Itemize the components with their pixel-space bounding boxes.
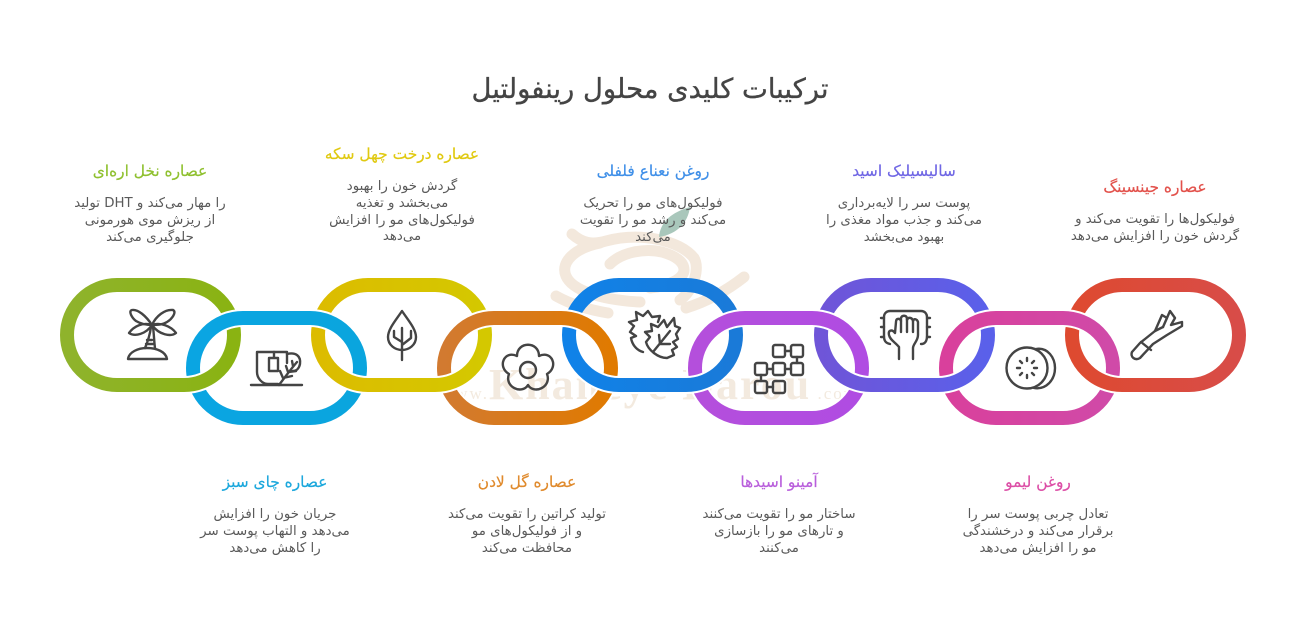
- text block: date palm: از ریزش موی هورمونی: [85, 213, 215, 228]
- text block: peppermint oil: می‌کند: [635, 230, 671, 245]
- link: even links over: [193, 318, 1113, 418]
- title: ترکیبات کلیدی محلول رینفولتیل: [472, 74, 828, 105]
- text block: salicylic acid: می‌کند و جذب مواد مغذی را: [826, 213, 982, 228]
- icon: tea cup with herb: [251, 352, 302, 385]
- text block: green tea: عصاره چای سبز: [223, 473, 327, 491]
- text block: amino acids: می‌کنند: [759, 541, 799, 556]
- text block: ginkgo: می‌دهد: [383, 229, 421, 244]
- text block: marigold: عصاره گل لادن: [478, 473, 576, 491]
- text block: amino acids: آمینو اسیدها: [740, 473, 818, 491]
- text block: ginseng: عصاره جینسینگ: [1103, 178, 1207, 196]
- icon: amino acid grid: [755, 345, 803, 393]
- icon: tree leaf: [388, 311, 416, 360]
- text block: lemon oil: مو را افزایش می‌دهد: [979, 541, 1097, 556]
- icon: palm tree: [128, 310, 176, 359]
- text block: green tea: جریان خون را افزایش: [214, 507, 336, 522]
- text block: date palm: عصاره نخل اره‌ای: [93, 162, 207, 180]
- text block: ginkgo: گردش خون را بهبود: [347, 179, 457, 194]
- text block: peppermint oil: روغن نعناع فلفلی: [597, 162, 709, 180]
- text block: date palm: [74, 162, 226, 245]
- text block: marigold: محافظت می‌کند: [482, 541, 572, 556]
- text block: amino acids: ساختار مو را تقویت می‌کنند: [702, 507, 856, 522]
- text block: ginkgo: می‌بخشد و تغذیه: [356, 196, 448, 211]
- text block: ginkgo: فولیکول‌های مو را افزایش: [329, 213, 475, 228]
- text block: ginseng: گردش خون را افزایش می‌دهد: [1071, 229, 1239, 244]
- link: odd links lower interlock: [62, 345, 1244, 394]
- text block: marigold: تولید کراتین را تقویت می‌کند: [448, 507, 606, 522]
- text block: lemon oil: تعادل چربی پوست سر را: [968, 507, 1108, 522]
- text block: peppermint oil: فولیکول‌های مو را تحریک: [583, 196, 723, 211]
- text block: peppermint oil: [580, 162, 726, 245]
- icon: mint leaves: [629, 311, 680, 358]
- text block: amino acids: [702, 472, 856, 556]
- icon: hand on scalp: [881, 311, 930, 359]
- text block: peppermint oil: می‌کند و رشد مو را تقویت: [580, 213, 726, 228]
- icon: lemon slice: [1006, 348, 1055, 388]
- text block: green tea: می‌دهد و التهاب پوست سر: [200, 524, 350, 539]
- text block: marigold: و از فولیکول‌های مو: [472, 524, 582, 539]
- text block: lemon oil: روغن لیمو: [1005, 473, 1071, 491]
- text block: green tea: [200, 473, 350, 556]
- text block: marigold: [448, 473, 606, 556]
- text block: date palm: را مهار می‌کند و DHT تولید: [74, 196, 226, 211]
- text block: lemon oil: برقرار می‌کند و درخشندگی: [963, 524, 1113, 539]
- text block: green tea: را کاهش می‌دهد: [229, 541, 321, 556]
- text block: ginseng: فولیکول‌ها را تقویت می‌کند و: [1075, 212, 1235, 227]
- text block: ginkgo: عصاره درخت چهل سکه: [325, 145, 479, 163]
- text block: salicylic acid: [826, 162, 982, 245]
- text block: salicylic acid: بهبود می‌بخشد: [864, 230, 944, 245]
- link: date palm (bottom layer): [67, 285, 1239, 385]
- text block: ginseng: [1071, 178, 1240, 244]
- text block: salicylic acid: سالیسیلیک اسید: [852, 162, 956, 180]
- text block: ginkgo: [325, 145, 479, 244]
- watermark text: www.Khaneye Darou .com: [441, 360, 859, 409]
- text block: salicylic acid: پوست سر را لایه‌برداری: [838, 196, 970, 211]
- icon: flower: [503, 345, 553, 389]
- icon: ginseng root: [1132, 311, 1182, 359]
- chain of nine interlocked links: [60, 278, 1246, 425]
- text block: lemon oil: [963, 473, 1113, 556]
- text block: amino acids: و تارهای مو را بازسازی: [714, 524, 844, 539]
- text block: date palm: جلوگیری می‌کند: [106, 230, 194, 245]
